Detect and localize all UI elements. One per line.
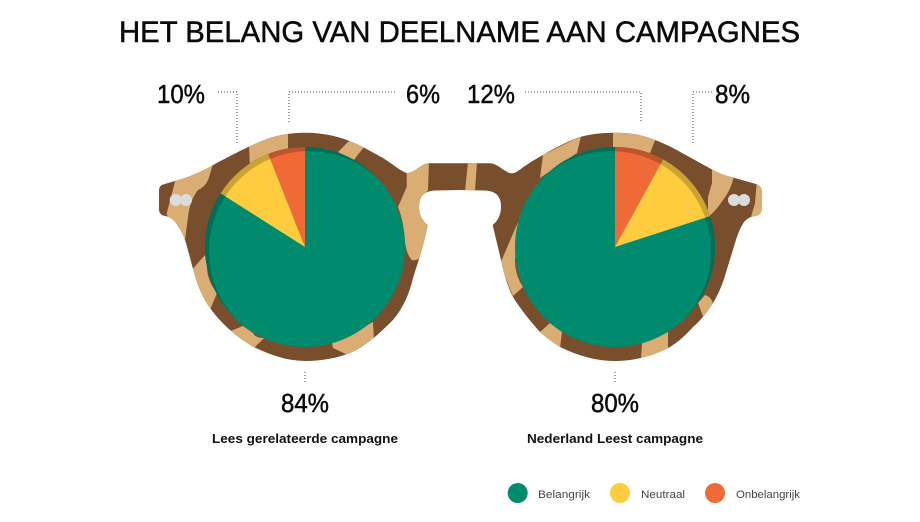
leader line: 80% — [614, 372, 616, 382]
glasses frame — [150, 125, 770, 370]
pie chart: left lens — [205, 147, 405, 347]
value: 84%: 84% — [281, 388, 329, 418]
legend item: Belangrijk: Belangrijk — [538, 489, 591, 501]
title: HET BELANG VAN DEELNAME AAN CAMPAGNES — [119, 16, 800, 49]
leader line: 12% — [525, 92, 641, 123]
pie chart: right lens — [515, 147, 715, 347]
screws: left hinge — [170, 194, 192, 206]
legend item: Belangrijk — [508, 483, 591, 503]
legend item: Onbelangrijk — [705, 483, 801, 503]
caption: left: Lees gerelateerde campagne — [212, 431, 398, 446]
legend item: Neutraal — [610, 483, 685, 503]
legend — [508, 483, 801, 503]
value: 8%: 8% — [715, 79, 750, 109]
leader line: 8% — [693, 92, 712, 143]
legend item: Onbelangrijk: Onbelangrijk — [736, 489, 801, 501]
leader line: 6% — [289, 92, 395, 123]
leader line: 10% — [218, 92, 237, 143]
value: 80%: 80% — [591, 388, 639, 418]
value: 6%: 6% — [406, 79, 440, 109]
value: 10%: 10% — [157, 79, 205, 109]
caption: right: Nederland Leest campagne — [527, 431, 703, 446]
screws: right hinge — [728, 194, 750, 206]
glasses — [150, 125, 770, 370]
leader line: 84% — [304, 372, 306, 382]
value: 12%: 12% — [467, 79, 515, 109]
legend item: Neutraal: Neutraal — [641, 489, 685, 501]
